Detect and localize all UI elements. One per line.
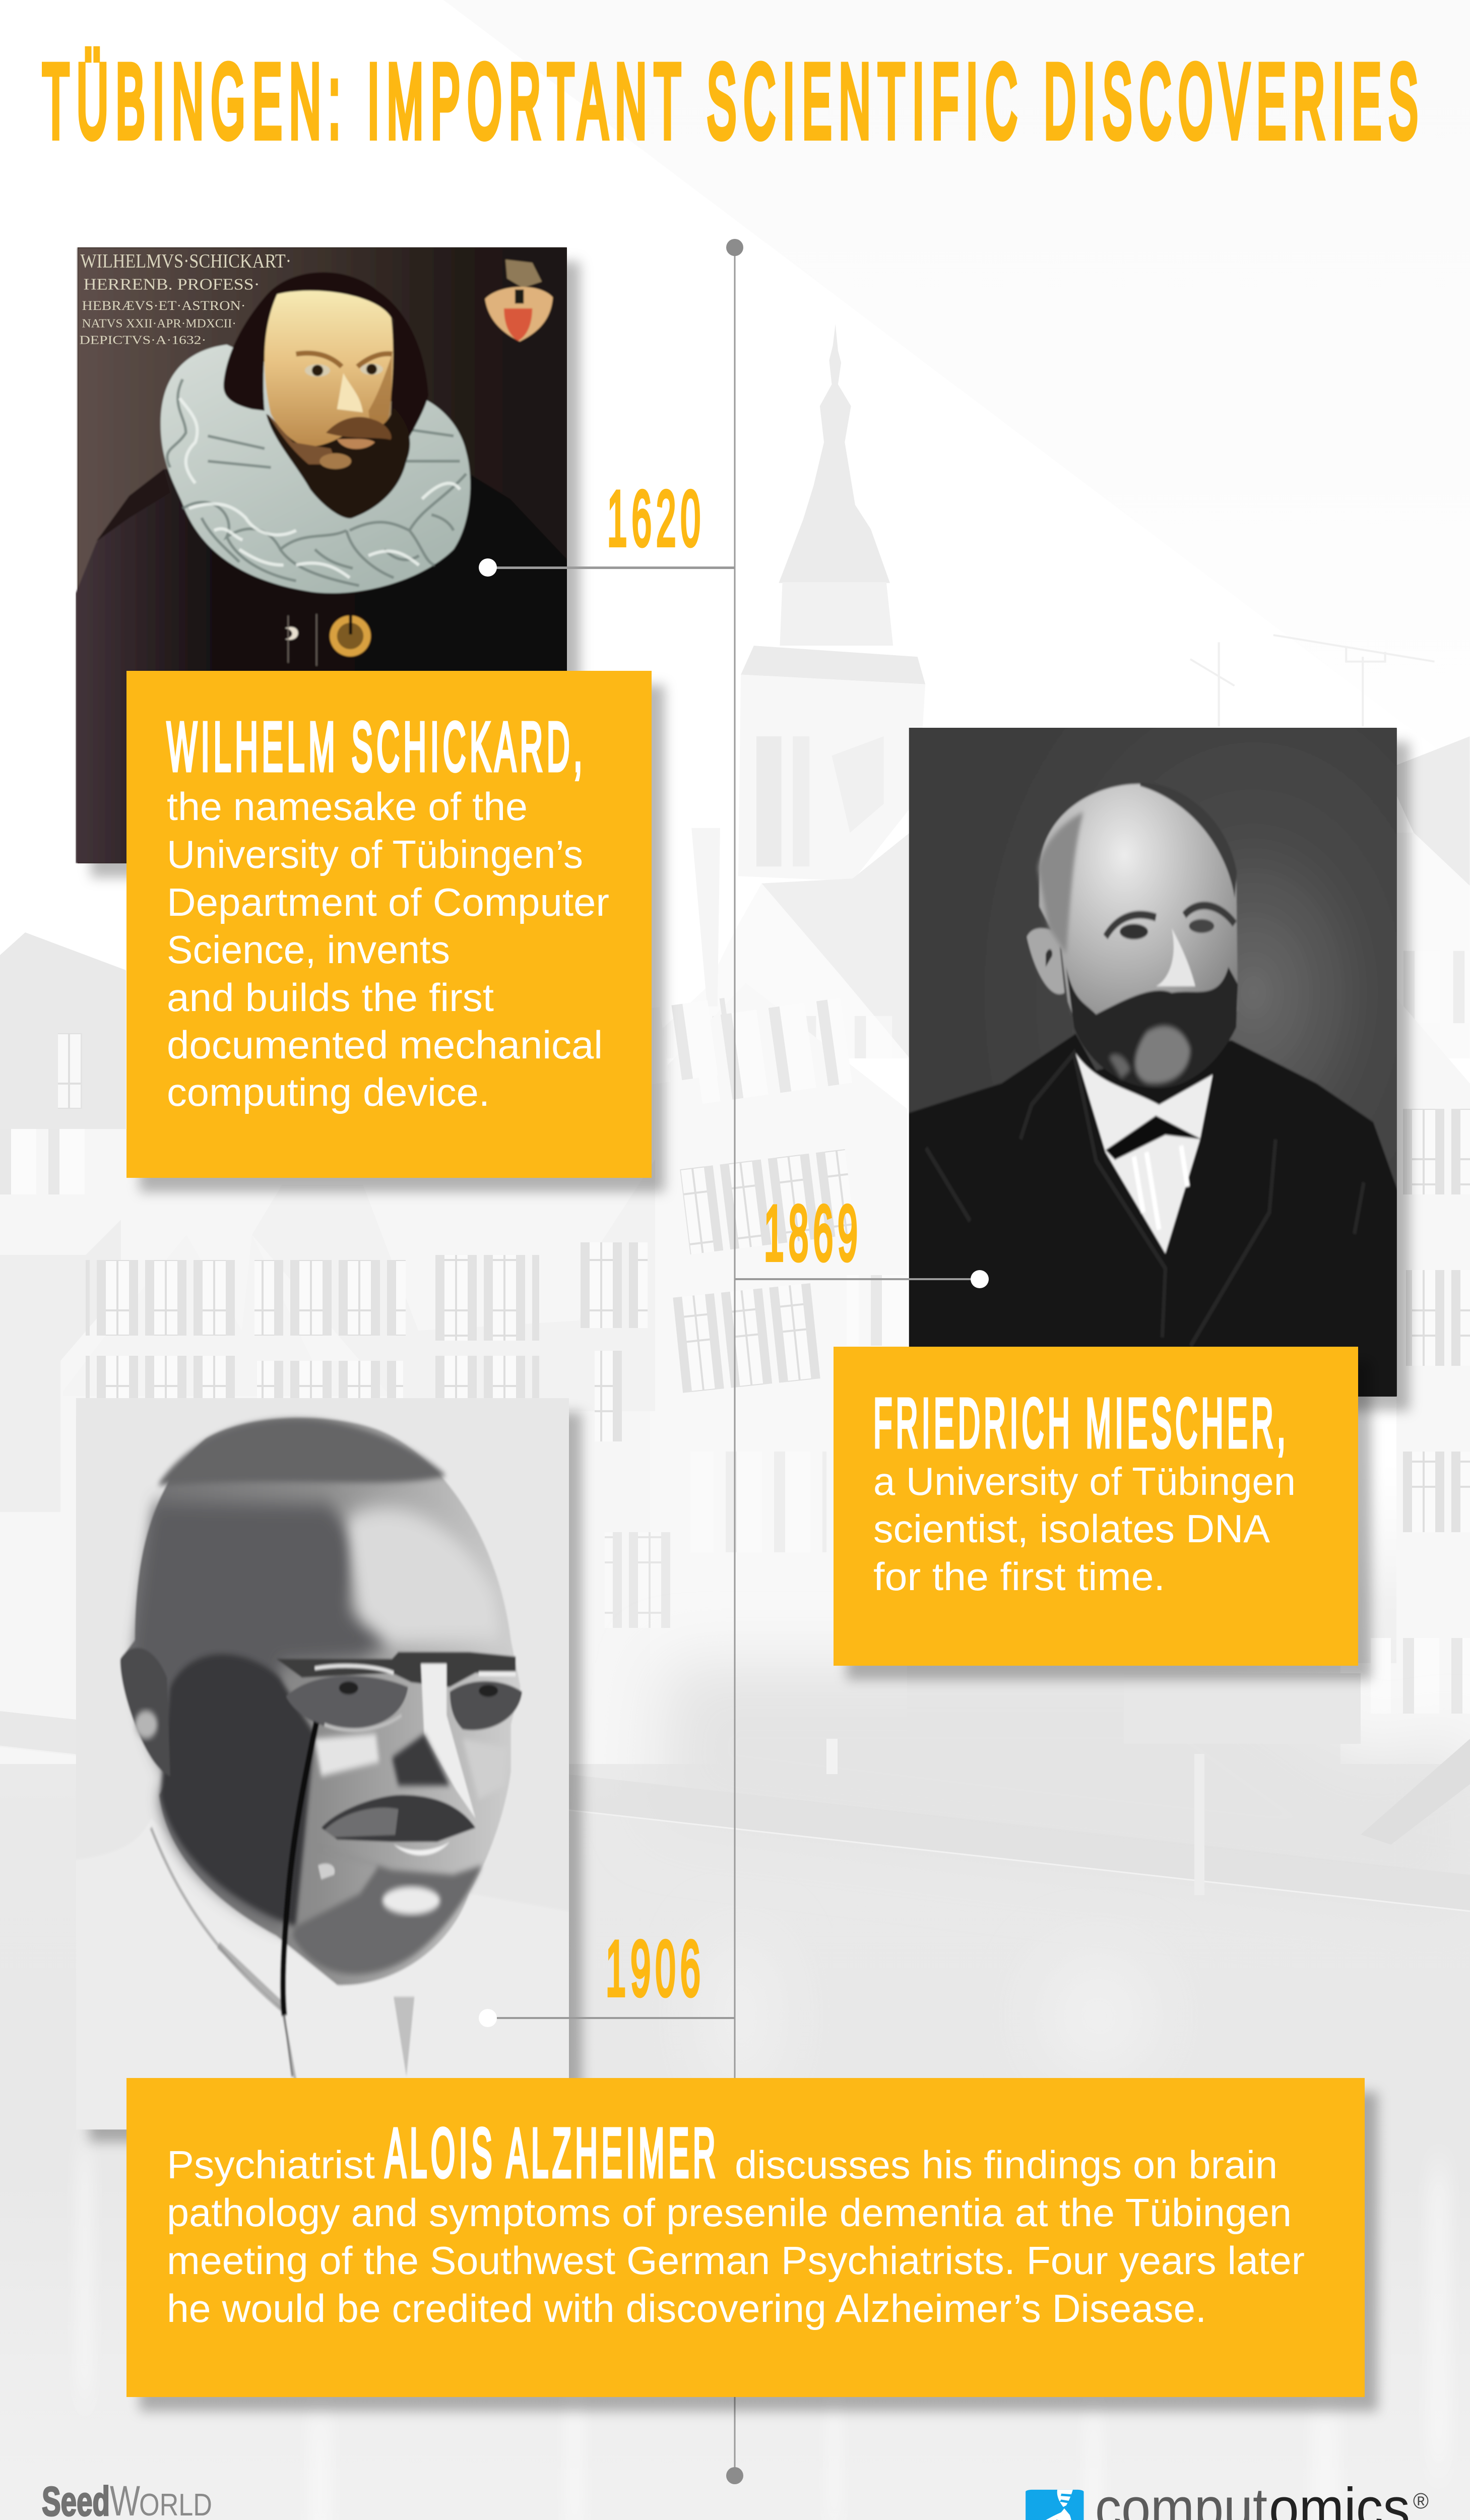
logo: Computomics xyxy=(1026,2477,1429,2520)
inscription: NATVS XXII·APR·MDXCII· xyxy=(82,317,236,330)
connector and year: 1620: 1620 xyxy=(607,475,705,562)
face xyxy=(265,291,393,453)
timeline axis xyxy=(726,239,743,2484)
card body text xyxy=(873,1459,1296,1599)
sun brooch xyxy=(285,614,371,666)
card body text xyxy=(167,784,609,1114)
portrait: Wilhelm Schickard xyxy=(76,247,569,863)
background: river wall, trees and reflections xyxy=(0,1663,1470,2520)
portrait: Friedrich Miescher xyxy=(907,726,1401,1401)
card body text: the namesake of the xyxy=(167,784,528,829)
background: house fronts xyxy=(0,932,1470,1764)
card body text: he would be credited with discovering Alzheimer’s Disease. xyxy=(167,2286,1206,2330)
card body text: for the first time. xyxy=(873,1554,1165,1599)
card body text: a University of Tübingen xyxy=(873,1459,1296,1503)
hair xyxy=(223,272,428,449)
inscription xyxy=(80,250,291,347)
pince-nez cord xyxy=(283,1722,316,2015)
card body text: Department of Computer xyxy=(167,880,609,924)
logo: Computomics: ® xyxy=(1413,2489,1429,2513)
logo: Seed World Amplify xyxy=(42,2477,212,2520)
card body text: computing device. xyxy=(167,1070,490,1114)
inscription: HEBRÆVS·ET·ASTRON· xyxy=(82,298,246,313)
panel: Wilhelm Schickard card: WILHELM SCHICKARD, xyxy=(167,708,586,786)
card body text: and builds the first xyxy=(167,975,494,1020)
panel: Wilhelm Schickard card xyxy=(126,671,652,1178)
card body text: discusses his findings on brain xyxy=(735,2143,1277,2187)
card body text: meeting of the Southwest German Psychiatrists. Four years later xyxy=(167,2238,1305,2283)
inscription: DEPICTVS·A·1632· xyxy=(80,334,206,347)
ruff collar xyxy=(161,345,470,593)
connector and year: 1906 xyxy=(479,1925,735,2027)
coat of arms xyxy=(485,260,553,342)
card body text: scientist, isolates DNA xyxy=(873,1506,1270,1551)
card body text: documented mechanical xyxy=(167,1023,603,1067)
spectacles xyxy=(276,1652,522,1730)
background: church tower xyxy=(655,324,1470,1058)
panel: Friedrich Miescher card xyxy=(834,1347,1358,1666)
icon: DNA helix xyxy=(1026,2490,1084,2520)
inscription: WILHELMVS·SCHICKART· xyxy=(80,250,291,272)
card body text: Psychiatrist xyxy=(167,2143,375,2187)
panel: Alois Alzheimer card: ALOIS ALZHEIMER xyxy=(385,2114,719,2192)
card body text: pathology and symptoms of presenile dementia at the Tübingen xyxy=(167,2190,1292,2235)
card body text xyxy=(167,2143,1305,2330)
moustache xyxy=(321,1795,476,1842)
connector and year: 1906: 1906 xyxy=(606,1925,705,2012)
inscription: HERRENB. PROFESS· xyxy=(84,275,260,293)
card body text: Science, invents xyxy=(167,927,450,972)
beard xyxy=(266,408,410,519)
connector and year: 1869: 1869 xyxy=(764,1189,862,1277)
panel: Alois Alzheimer card xyxy=(126,2078,1365,2397)
portrait: Alois Alzheimer xyxy=(71,1396,574,2132)
card body text: University of Tübingen’s xyxy=(167,832,583,876)
connector and year: 1620 xyxy=(479,475,735,577)
